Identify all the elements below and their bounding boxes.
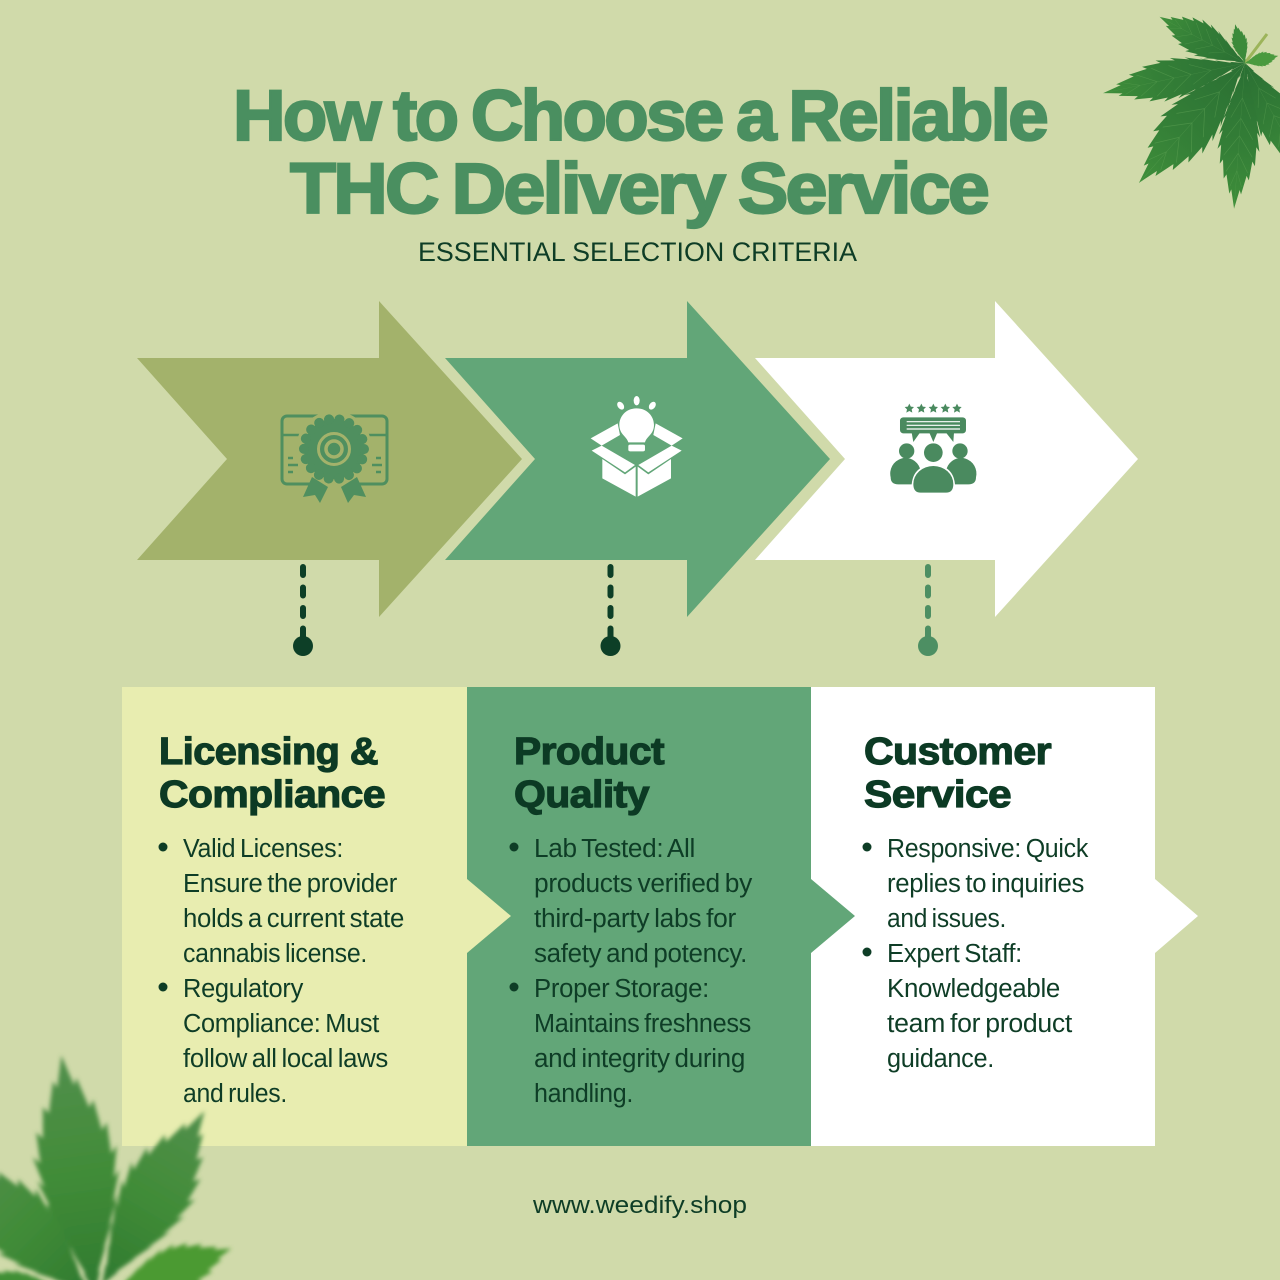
connector 2	[600, 567, 620, 656]
heading: customer service: Customer	[864, 731, 1052, 773]
arrow 1: licensing	[137, 301, 522, 617]
bullet list: licensing and compliance: and rules.	[183, 1080, 287, 1108]
bullet list: product quality: handling.	[534, 1080, 633, 1108]
bullet list: product quality: Proper Storage:	[534, 975, 709, 1003]
icon: cannabis leaf bottom left	[0, 1049, 240, 1280]
icon: light bulb in box	[591, 396, 683, 497]
heading: product quality	[514, 731, 665, 816]
subtitle: ESSENTIAL SELECTION CRITERIA	[418, 237, 857, 267]
bullet list: customer service: team for product	[887, 1010, 1072, 1038]
bullet list: customer service	[862, 835, 1089, 1073]
title: THC Delivery Service	[290, 150, 988, 229]
bullet list: product quality: third-party labs for	[534, 905, 737, 933]
arrow 2: product quality	[445, 301, 830, 617]
connector 1	[293, 567, 313, 656]
icon: certificate	[282, 411, 387, 503]
bullet list: product quality: products verified by	[534, 870, 753, 898]
bullet list: licensing and compliance: Valid Licenses:	[183, 835, 343, 863]
bullet list: licensing and compliance: Ensure the provider	[183, 870, 398, 898]
bullet list: product quality	[510, 835, 753, 1108]
panel: licensing and compliance	[122, 687, 511, 1146]
heading: product quality: Quality	[514, 774, 649, 816]
heading: customer service: Service	[864, 774, 1011, 816]
bullet list: licensing and compliance: Compliance: Must	[183, 1010, 379, 1038]
icon: cannabis leaf top right	[1099, 1, 1280, 210]
bullet list: customer service: and issues.	[887, 905, 1006, 933]
panel: product quality	[467, 687, 855, 1146]
heading: licensing and compliance: Licensing &	[159, 731, 378, 773]
bullet list: licensing and compliance: follow all local laws	[183, 1045, 388, 1073]
website url: www.weedify.shop	[532, 1192, 747, 1219]
heading: licensing and compliance: Compliance	[159, 774, 385, 816]
bullet list: licensing and compliance	[158, 835, 404, 1108]
bullet list: licensing and compliance: cannabis license.	[183, 940, 367, 968]
heading: licensing and compliance	[159, 731, 385, 816]
title: How to Choose a Reliable	[233, 77, 1047, 156]
bullet list: product quality: safety and potency.	[534, 940, 747, 968]
bullet list: licensing and compliance: holds a current state	[183, 905, 404, 933]
icon: rated team	[890, 404, 976, 493]
bullet list: product quality: and integrity during	[534, 1045, 745, 1073]
bullet list: product quality: Maintains freshness	[534, 1010, 751, 1038]
bullet list: customer service: Expert Staff:	[887, 940, 1022, 968]
panel: customer service	[811, 687, 1198, 1146]
heading: product quality: Product	[514, 731, 665, 773]
bullet list: product quality: Lab Tested: All	[534, 835, 695, 863]
bullet list: customer service: replies to inquiries	[887, 870, 1084, 898]
arrow 3: customer service	[755, 301, 1138, 617]
bullet list: licensing and compliance: Regulatory	[183, 975, 304, 1003]
heading: customer service	[864, 731, 1052, 816]
bullet list: customer service: guidance.	[887, 1045, 994, 1073]
title	[233, 77, 1047, 229]
connector 3	[918, 567, 938, 656]
bullet list: customer service: Responsive: Quick	[887, 835, 1089, 863]
bullet list: customer service: Knowledgeable	[887, 975, 1060, 1003]
